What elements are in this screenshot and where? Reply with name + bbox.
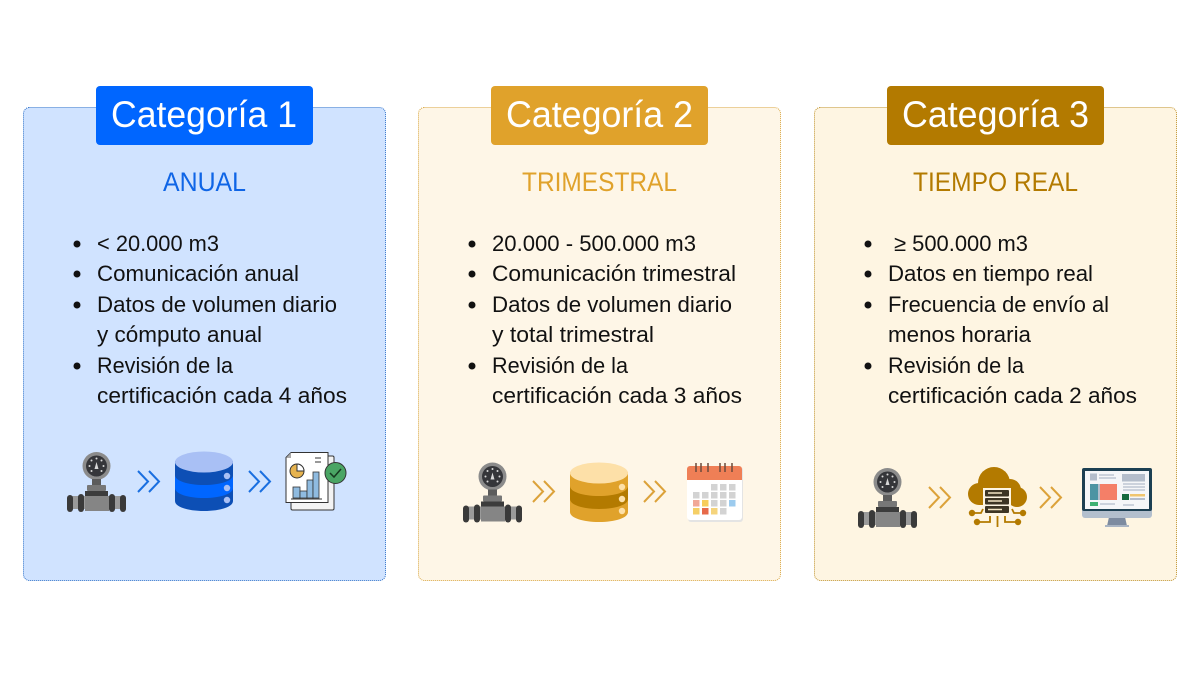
heading: TIEMPO REAL: TIEMPO REAL — [913, 167, 1078, 197]
list: tiempo real — [864, 231, 1137, 408]
list: tiempo real: Revisión de la — [888, 353, 1025, 378]
arrow: double chevron — [533, 481, 554, 502]
arrow: double chevron — [644, 481, 665, 502]
list: anual: y cómputo anual — [97, 322, 262, 347]
list: anual: Datos de volumen diario — [97, 292, 337, 317]
badge: Categoría 2 — [491, 86, 708, 145]
list: anual: certificación cada 4 años — [97, 383, 347, 408]
badge: Categoría 3 — [887, 86, 1104, 145]
icon: calendar — [687, 463, 743, 522]
heading: TRIMESTRAL: TRIMESTRAL — [522, 167, 677, 197]
list: tiempo real: menos horaria — [888, 322, 1032, 347]
badge: Categoría 2: Categoría 2 — [506, 94, 693, 135]
list: trimestral: y total trimestral — [492, 322, 654, 347]
badge: Categoría 1 — [96, 86, 313, 145]
arrow: double chevron — [249, 471, 270, 492]
arrow: double chevron — [138, 471, 159, 492]
icon: water meter — [67, 452, 126, 512]
list: tiempo real: Frecuencia de envío al — [888, 292, 1109, 317]
icon: water meter — [463, 462, 522, 522]
icon: report — [286, 452, 346, 510]
panel: categoría 3 — [814, 86, 1176, 580]
list: anual: < 20.000 m3 — [97, 231, 219, 256]
list: trimestral: Datos de volumen diario — [492, 292, 732, 317]
panel: categoría 1 — [24, 86, 386, 580]
arrow: double chevron — [1040, 487, 1061, 508]
icon: cloud server — [968, 467, 1027, 527]
icon: database — [175, 452, 233, 511]
list: trimestral: Comunicación trimestral — [492, 261, 736, 286]
heading: ANUAL: ANUAL — [163, 167, 246, 197]
icon: water meter — [858, 468, 917, 528]
badge: Categoría 3: Categoría 3 — [902, 94, 1089, 135]
list: anual: Revisión de la — [97, 353, 234, 378]
list: trimestral: certificación cada 3 años — [492, 383, 742, 408]
list: trimestral: Revisión de la — [492, 353, 629, 378]
list: tiempo real: Datos en tiempo real — [888, 261, 1093, 286]
list: trimestral: 20.000 - 500.000 m3 — [492, 231, 696, 256]
list: tiempo real: certificación cada 2 años — [888, 383, 1137, 408]
list: anual — [74, 231, 347, 408]
arrow: double chevron — [929, 487, 950, 508]
list: anual: Comunicación anual — [97, 261, 299, 286]
icon: monitor dashboard — [1082, 468, 1152, 527]
list: tiempo real: ≥ 500.000 m3 — [894, 231, 1028, 256]
list: trimestral — [468, 231, 742, 408]
badge: Categoría 1: Categoría 1 — [111, 94, 297, 135]
icon: database — [570, 462, 628, 522]
panel: categoría 2 — [418, 86, 780, 580]
